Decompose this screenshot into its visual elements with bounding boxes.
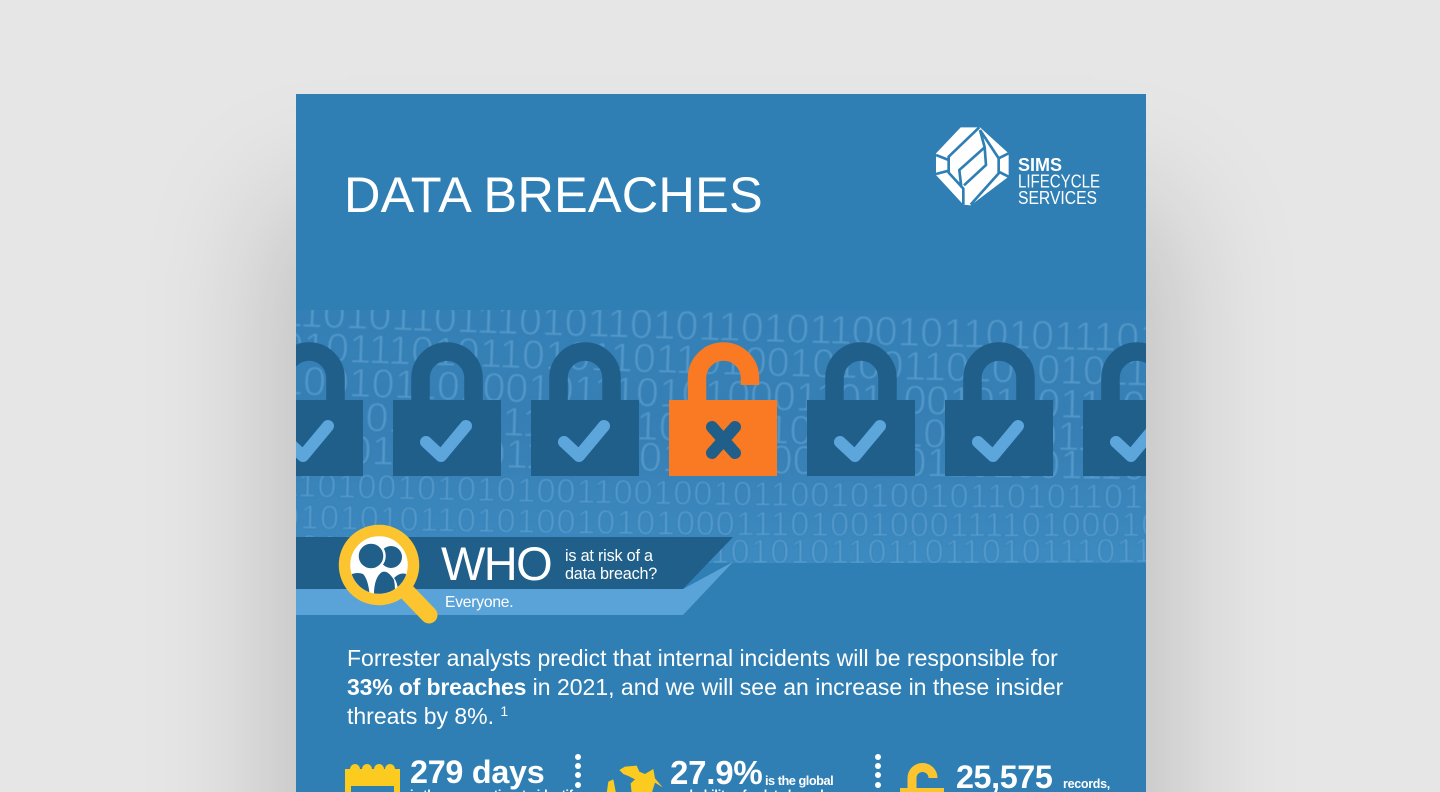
who subtitle: data breach? — [565, 565, 657, 583]
logo wordmark: SERVICES — [1018, 187, 1097, 208]
text block: forrester prediction: 33% of breaches in 2021, and we will see an increase in these insider — [347, 674, 1064, 700]
divider dots — [575, 754, 581, 788]
icon: octagon logo mark — [936, 127, 1009, 205]
binary code band: 1001011010010111010100011011001011011101 — [296, 367, 1143, 418]
stat value: 27.9% — [670, 754, 763, 791]
binary code band: 1101011011101011010110101100101101011101 — [296, 310, 1146, 350]
icon: open padlock — [900, 768, 944, 792]
lock row — [255, 352, 1191, 476]
ribbon dark — [296, 537, 733, 589]
icon: locked padlock 6 — [945, 352, 1053, 476]
logo wordmark: SIMS — [1018, 154, 1062, 175]
logo wordmark — [1018, 158, 1100, 204]
stat caption: is the global — [765, 773, 833, 788]
who subtitle — [566, 549, 657, 579]
text block: forrester prediction: Forrester analysts predict that internal incidents will be responsible for — [347, 645, 1058, 671]
stat caption: records, — [1063, 777, 1110, 791]
icon: locked padlock 2 — [393, 352, 501, 476]
icon: open orange padlock — [669, 352, 777, 476]
text block: forrester prediction — [347, 645, 1064, 729]
text block: forrester prediction: threats by 8%. — [347, 703, 494, 729]
icon: locked padlock 7 — [1083, 342, 1146, 476]
stat value: 279 days — [410, 754, 544, 790]
binary code band: 0101110101101011011010010100110101010110 — [296, 333, 1146, 386]
binary code band: 1010110100110101011011001011011010011100 — [363, 436, 1141, 480]
binary code band — [296, 310, 1146, 563]
binary code band: 0111010010110100101110100110101101011001 — [368, 403, 1083, 450]
icon: calendar — [345, 764, 400, 792]
stat: 279 days — [345, 760, 574, 792]
who word: WHO — [441, 537, 551, 590]
logo wordmark: LIFECYCLE — [1018, 170, 1100, 192]
who subtitle: is at risk of a — [565, 547, 653, 565]
answer: Everyone. — [445, 594, 513, 611]
ribbon: who heading — [296, 530, 733, 615]
ribbon light — [296, 562, 733, 615]
text block: forrester prediction: 1 — [500, 703, 508, 719]
icon: magnifier with people — [344, 530, 429, 615]
icon: locked padlock 5 — [807, 352, 915, 476]
icon: globe — [607, 766, 663, 792]
logo: Sims Lifecycle Services — [936, 127, 1100, 208]
icon: locked padlock 1 — [296, 342, 363, 476]
panel: infographic card — [296, 94, 1146, 792]
stat: 27.9% — [606, 760, 833, 792]
title: DATA BREACHES — [344, 166, 763, 223]
divider dots — [875, 754, 881, 788]
stat: 25,575 records — [900, 763, 1110, 792]
icon: locked padlock 3 — [531, 352, 639, 476]
